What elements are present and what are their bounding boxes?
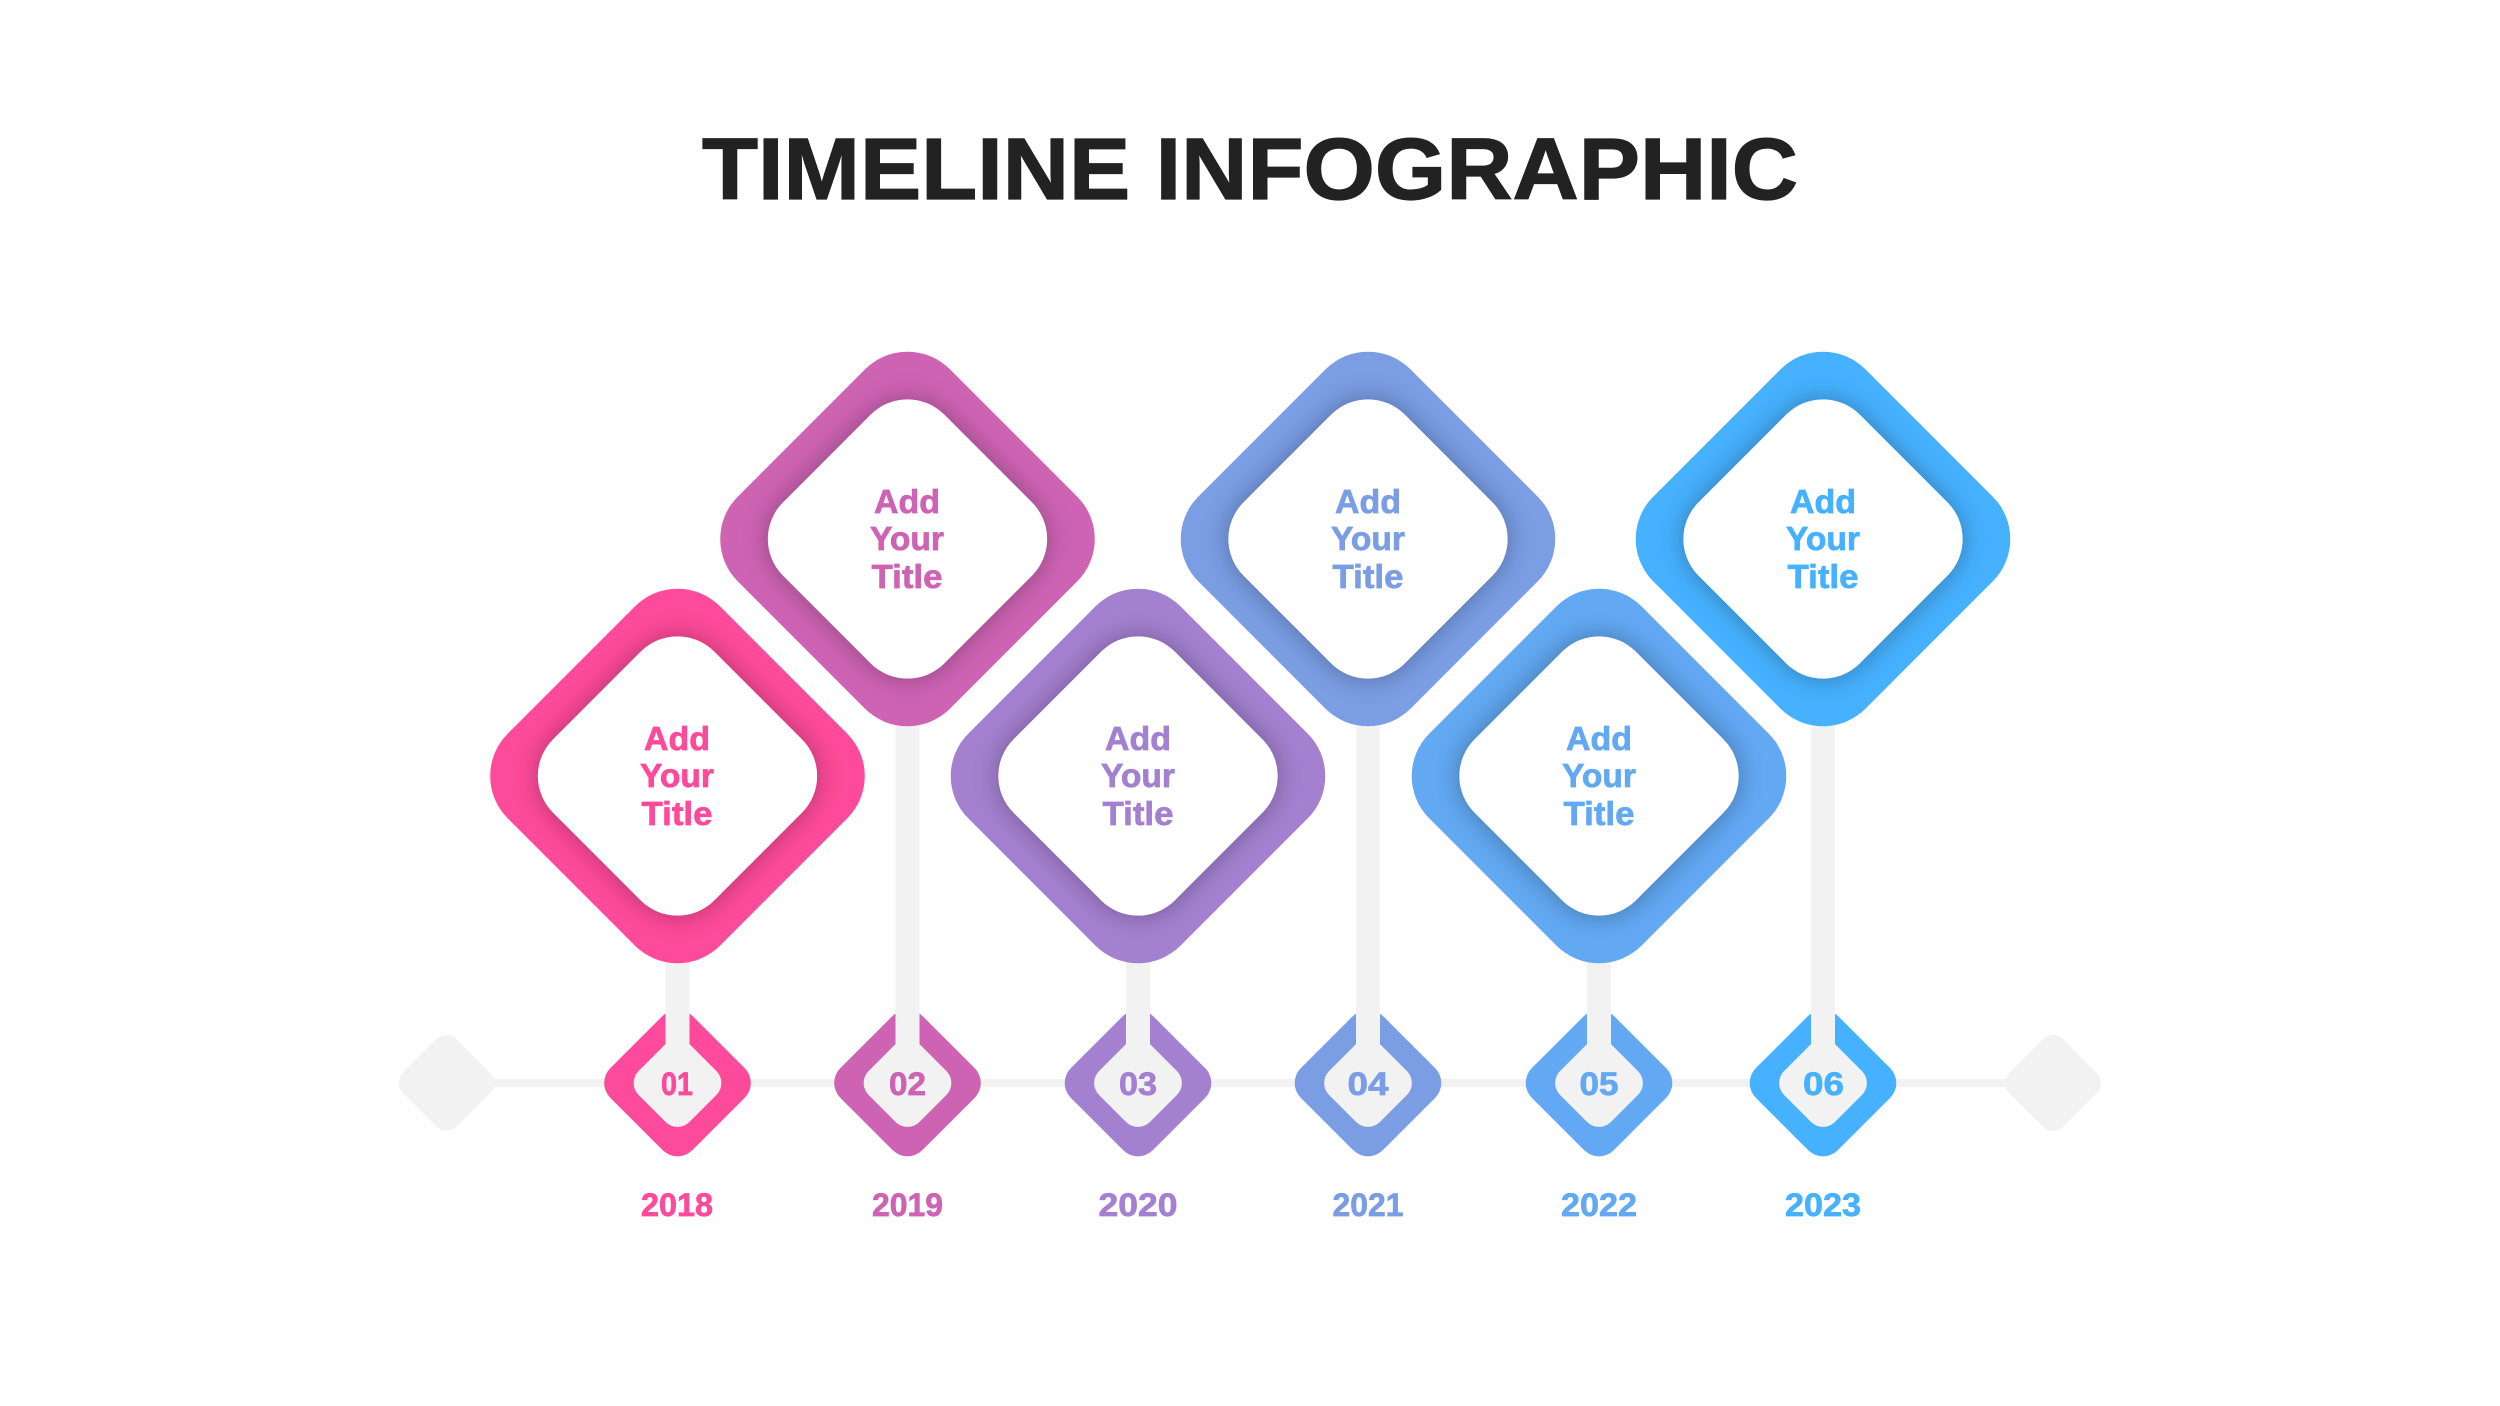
- number 06: 06: [1803, 1066, 1844, 1102]
- label 02: [870, 483, 944, 595]
- start marker: [393, 1029, 500, 1137]
- diamond 06 ring: [1611, 327, 2035, 751]
- year 2018: 2018: [641, 1187, 713, 1223]
- stem 06: [1811, 539, 1835, 1083]
- node 01 inner: [627, 1032, 728, 1134]
- stem 02: [896, 539, 920, 1083]
- milestone 06: [1611, 327, 2035, 1223]
- diamond 02 shadow: [746, 378, 1069, 700]
- label 05: Add: [1566, 720, 1632, 757]
- year 2020: 2020: [1098, 1187, 1178, 1223]
- label 06: Add: [1790, 483, 1856, 520]
- year 2023: 2023: [1785, 1187, 1861, 1223]
- diamond 05 shadow: [1438, 615, 1760, 937]
- node 02 outer: [825, 1001, 990, 1165]
- label 05: Title: [1564, 795, 1634, 832]
- node 05 outer: [1517, 1001, 1681, 1165]
- timeline axis: [393, 1029, 2107, 1137]
- label 05: [1562, 720, 1636, 832]
- label 02: Add: [874, 483, 940, 520]
- label 01: Title: [642, 795, 712, 832]
- diamond 03 shadow: [977, 615, 1299, 937]
- node 04 outer: [1286, 1001, 1450, 1165]
- label 03: Title: [1102, 795, 1174, 832]
- node 05 inner: [1548, 1032, 1650, 1134]
- stem 03: [1126, 776, 1150, 1083]
- diamond 03 ring: [926, 564, 1350, 988]
- diamond 06 shadow: [1662, 378, 1984, 700]
- milestone 04: [1156, 327, 1580, 1223]
- stem 01: [666, 776, 690, 1083]
- end marker: [1999, 1029, 2107, 1137]
- diamond 02 centre: [746, 378, 1069, 700]
- label 04: [1331, 483, 1405, 595]
- label 02: Your: [870, 520, 944, 557]
- stem 05: [1587, 776, 1611, 1083]
- number 03: 03: [1119, 1066, 1157, 1102]
- label 03: [1101, 720, 1175, 832]
- label 01: [640, 720, 714, 832]
- node 04 inner: [1317, 1032, 1419, 1134]
- label 03: Add: [1105, 720, 1171, 757]
- label 03: Your: [1101, 757, 1175, 794]
- diamond 04 shadow: [1207, 378, 1529, 700]
- node 03 inner: [1087, 1032, 1189, 1134]
- label 06: [1786, 483, 1860, 595]
- milestone 02: [695, 327, 1120, 1223]
- label 04: Add: [1335, 483, 1401, 520]
- node 06 inner: [1772, 1032, 1874, 1134]
- title: TIMELINE INFOGRAPHIC: [702, 121, 1798, 218]
- milestone 03: [926, 564, 1350, 1223]
- label 06: Your: [1786, 520, 1860, 557]
- diamond 06 centre: [1662, 378, 1984, 700]
- milestone 01: [465, 564, 890, 1223]
- year 2021: 2021: [1332, 1187, 1404, 1223]
- year 2022: 2022: [1561, 1187, 1637, 1223]
- diamond 05 ring: [1387, 564, 1811, 988]
- label 04: Title: [1332, 558, 1404, 595]
- diamond 05 centre: [1438, 615, 1760, 937]
- node 03 outer: [1056, 1001, 1220, 1165]
- label 06: Title: [1788, 558, 1858, 595]
- diamond 04 centre: [1207, 378, 1529, 700]
- label 04: Your: [1331, 520, 1405, 557]
- diamond 02 ring: [695, 327, 1120, 751]
- number 01: 01: [661, 1066, 693, 1102]
- node 02 inner: [857, 1032, 958, 1134]
- label 05: Your: [1562, 757, 1636, 794]
- milestone 05: [1387, 564, 1811, 1223]
- label 01: Your: [640, 757, 714, 794]
- node 01 outer: [595, 1001, 760, 1165]
- diamond 01 ring: [465, 564, 890, 988]
- label 02: Title: [872, 558, 942, 595]
- diamond 01 shadow: [516, 615, 839, 937]
- number 02: 02: [889, 1066, 926, 1102]
- node 06 outer: [1741, 1001, 1905, 1165]
- diamond 01 centre: [516, 615, 839, 937]
- year 2019: 2019: [872, 1187, 943, 1223]
- diamond 03 centre: [977, 615, 1299, 937]
- label 01: Add: [644, 720, 710, 757]
- number 05: 05: [1580, 1066, 1618, 1102]
- diamond 04 ring: [1156, 327, 1580, 751]
- stem 04: [1356, 539, 1380, 1083]
- number 04: 04: [1348, 1066, 1389, 1102]
